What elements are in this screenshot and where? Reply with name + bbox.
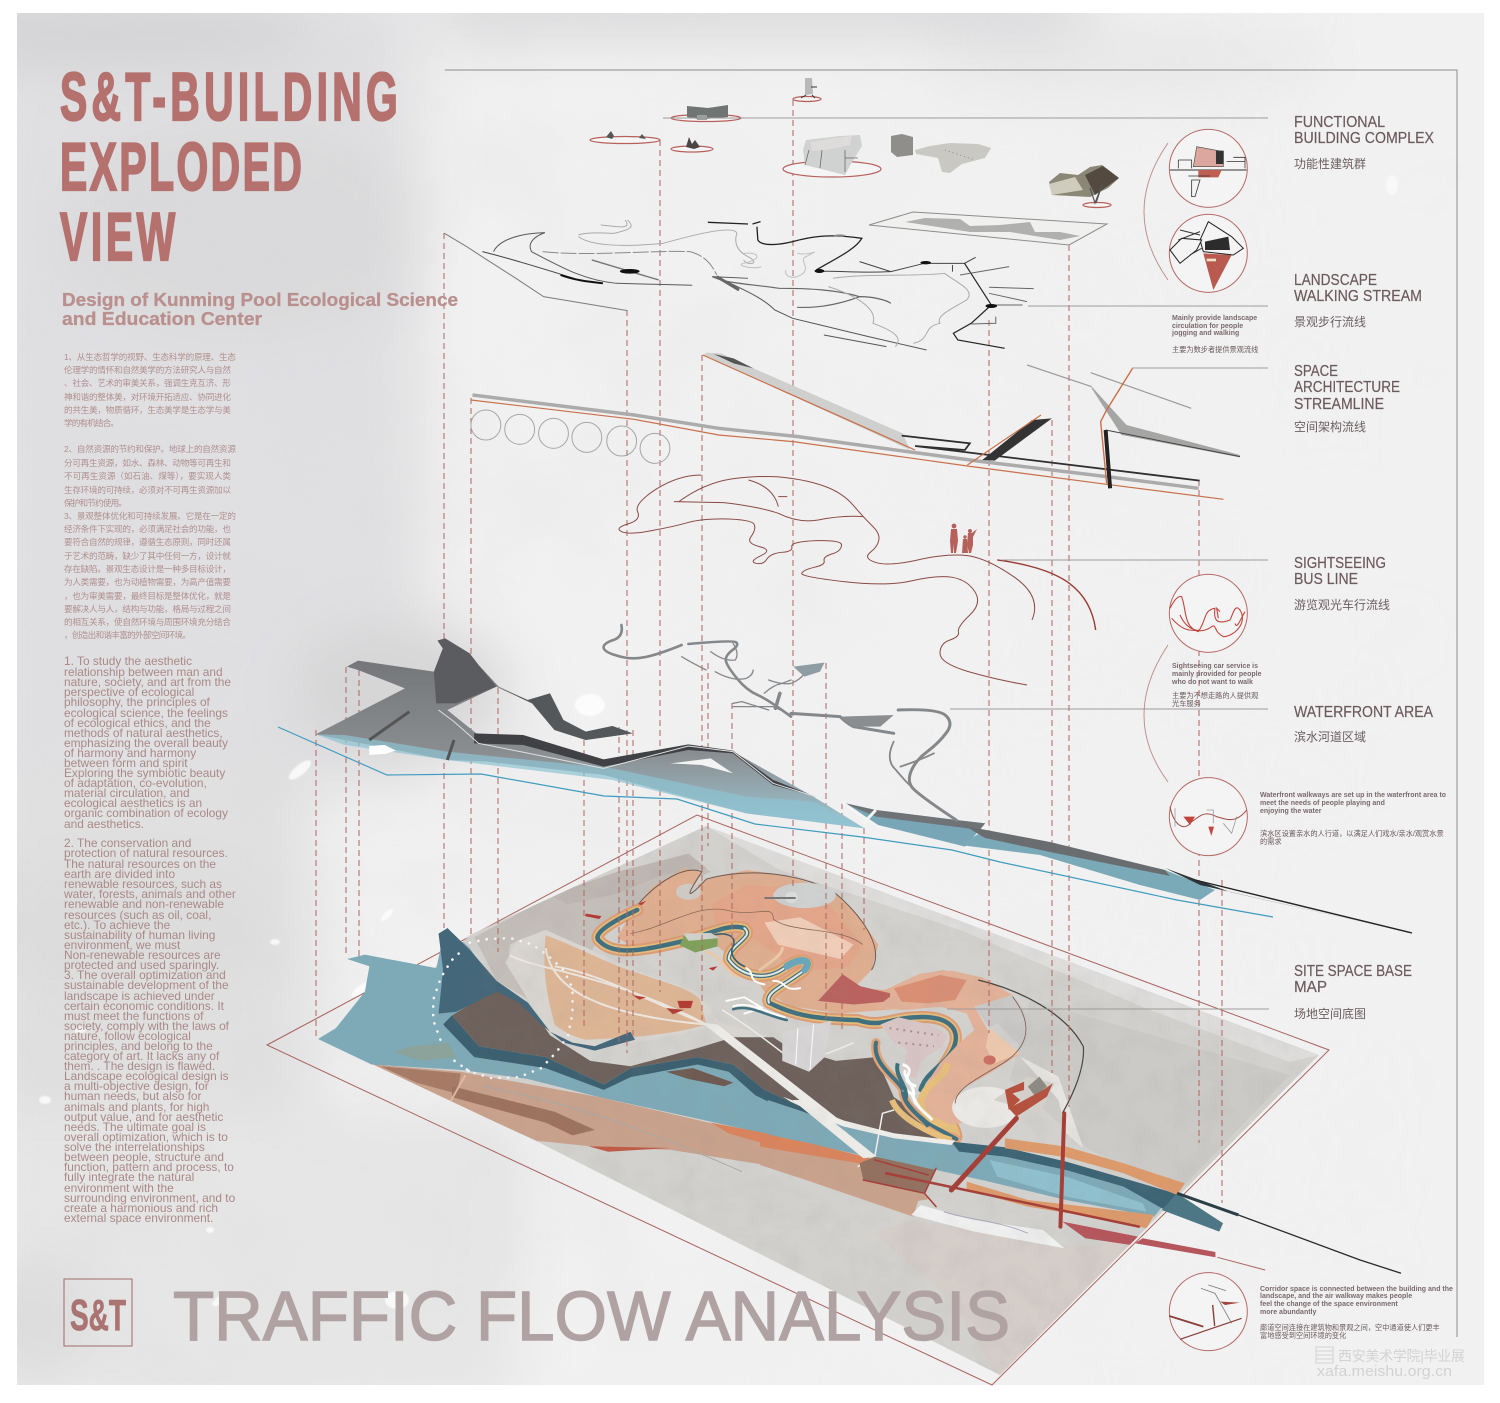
layer: functional building complex — [590, 78, 1119, 245]
logo: S&T square: S&T — [70, 1291, 126, 1340]
yellow banks — [921, 1063, 955, 1130]
english body text: human needs, but also for — [64, 1089, 202, 1103]
chinese body text: 生存环境的可持续，必须对不可再生资源加以 — [64, 484, 231, 495]
east pavilion — [993, 1077, 1055, 1113]
english body text: renewable resources, such as — [64, 877, 222, 891]
english body text: principles, and belong to the — [64, 1039, 213, 1053]
note: sightseeing: 光车服务 — [1172, 699, 1201, 708]
english body text: sustainable development of the — [64, 978, 229, 992]
east orange banks — [1005, 1138, 1185, 1195]
chinese body text: 要解决人与人，结构与功能，格局与过程之间 — [64, 603, 231, 614]
note: corridor: landscape, and the air walkway makes people — [1260, 1293, 1412, 1300]
english body text: environment with the — [64, 1181, 174, 1195]
note: waterfront: 的需求 — [1260, 837, 1282, 846]
english body text: Exploring the symbiotic beauty — [64, 766, 225, 780]
long deck — [472, 395, 1199, 488]
title line 3: VIEW — [60, 198, 175, 275]
english body text: resources (such as oil, coal, — [64, 908, 211, 922]
label: landscape walking stream — [1294, 272, 1422, 329]
note: corridor: Corridor space is connected between the building and the — [1260, 1286, 1453, 1293]
note: corridor — [1260, 1286, 1453, 1340]
main river — [768, 1100, 1173, 1217]
pier building white — [911, 1205, 1064, 1248]
extra strands — [726, 968, 800, 1017]
south tail — [996, 1245, 1130, 1375]
label: waterfront area: WATERFRONT AREA — [1294, 704, 1433, 721]
english body text: material circulation, and — [64, 786, 190, 800]
frame lines — [445, 70, 1457, 1337]
red bridges — [863, 1113, 1139, 1227]
english body text: The natural resources on the — [64, 857, 216, 871]
chinese body text: 2、自然资源的节约和保护。地球上的自然资源 — [64, 443, 236, 454]
label: space architecture streamline: STREAMLINE — [1294, 396, 1384, 413]
english body text: perspective of ecological — [64, 685, 194, 699]
english body text: solve the interrelationships — [64, 1140, 205, 1154]
english body text: must meet the functions of — [64, 1009, 204, 1023]
south bank — [372, 1064, 930, 1206]
chinese body text: 的共生美，物质循环，生态美学是生态学与美 — [64, 404, 231, 415]
label: functional building complex — [1294, 114, 1434, 171]
english body text: water, forests, animals and other — [63, 887, 236, 901]
detail circle: corridor — [1169, 1273, 1247, 1351]
label: space architecture streamline: 空间架构流线 — [1294, 419, 1366, 434]
english body text: 1. To study the aesthetic — [64, 654, 192, 668]
english body text: ecological science, the feelings — [64, 706, 228, 720]
english body text: and aesthetics. — [64, 817, 144, 831]
chinese body text: 保护和节约使用。 — [64, 497, 127, 508]
plaque — [869, 212, 1107, 245]
title — [60, 58, 398, 275]
english body text: protection of natural resources. — [64, 846, 228, 860]
note: waterfront: Waterfront walkways are set up in the waterfront area to — [1260, 792, 1446, 799]
english body text: external space environment. — [64, 1211, 213, 1225]
leader lines — [663, 118, 1269, 1009]
english body text: protected and used sparingly. — [64, 958, 219, 972]
english body text: output value, and for aesthetic — [64, 1110, 223, 1124]
lake ribbon — [316, 638, 865, 828]
strip extensions beyond map — [1135, 1193, 1401, 1273]
english body text: create a harmonious and rich — [64, 1201, 218, 1215]
english body text: ecological aesthetics is an — [64, 796, 202, 810]
layers in east-crop coordinates — [760, 971, 1223, 1377]
english body text: animals and plants, for high — [64, 1100, 209, 1114]
west water overhang — [318, 928, 488, 1072]
small red pavilions — [585, 901, 718, 1014]
note: sightseeing: who do not want to walk — [1171, 679, 1253, 686]
logo: S&T square — [64, 1279, 132, 1346]
label: sightseeing bus line — [1294, 555, 1390, 612]
note: waterfront: 滨水区设置亲水的人行道，以满足人们戏水/亲水/观赏水景 — [1260, 829, 1444, 838]
black wedge — [982, 418, 1052, 461]
watermark: 西安美术学院|毕业展 — [1338, 1348, 1465, 1364]
chinese body text: ，也为审美需要，最终目标是整体优化，就是 — [64, 590, 231, 601]
label: landscape walking stream: LANDSCAPE — [1294, 272, 1377, 289]
label: site space base map: 场地空间底图 — [1294, 1006, 1366, 1021]
label: landscape walking stream: WALKING STREAM — [1294, 288, 1422, 305]
label: site space base map — [1294, 963, 1412, 1021]
chinese body text: 神和谐的整体美，对环境开拓适应、协同进化 — [64, 391, 231, 402]
chinese body text: 分可再生资源，如水、森林、动物等可再生和 — [64, 457, 231, 468]
chinese body text: 经济条件下实现的，必须满足社会的功能，也 — [64, 523, 231, 534]
cantilever building — [1049, 165, 1119, 203]
layer: waterfront area — [316, 625, 987, 850]
science pavilion — [803, 135, 862, 175]
chinese body text: 、社会、艺术的审美关系，强调生克互济、形 — [64, 377, 231, 388]
label: site space base map: SITE SPACE BASE — [1294, 963, 1412, 980]
detail circle: building plan — [1169, 214, 1247, 292]
chinese body text: 不可再生资源（如石油、煤等），要实现人类 — [64, 470, 231, 481]
causeway over water — [793, 1100, 877, 1158]
english body text: category of art. It lacks any of — [64, 1049, 220, 1063]
meander river bands — [597, 910, 956, 1139]
building cluster — [880, 1017, 947, 1079]
english body text: landscape is achieved under — [64, 989, 215, 1003]
note: corridor: more abundantly — [1260, 1309, 1317, 1316]
label: functional building complex: FUNCTIONAL — [1294, 114, 1385, 131]
detail circle: waterfront — [1169, 778, 1247, 856]
note: corridor: 富地感受到空间环境的变化 — [1260, 1331, 1346, 1340]
note: waterfront: enjoying the water — [1260, 808, 1322, 815]
label: space architecture streamline: SPACE — [1294, 363, 1338, 380]
note: landscape — [1171, 315, 1258, 354]
note: landscape: jogging and walking — [1171, 330, 1239, 337]
heading: traffic flow analysis: TRAFFIC FLOW ANALYSIS — [173, 1277, 1010, 1355]
note: sightseeing: 主要为不想走路的人提供观 — [1172, 691, 1258, 700]
note: corridor: feel the change of the space environment — [1260, 1301, 1398, 1308]
label: landscape walking stream: 景观步行流线 — [1294, 315, 1366, 329]
english body text: philosophy, the principles of — [64, 695, 211, 709]
english body text: of adaptation, co-evolution, — [64, 776, 207, 790]
note: landscape: Mainly provide landscape — [1172, 315, 1257, 322]
map concrete ground — [372, 826, 1319, 1375]
east stretch — [842, 803, 985, 847]
vertical dashed connectors — [316, 100, 1222, 1203]
chinese body text: 学的有机结合。 — [64, 417, 119, 428]
label: sightseeing bus line: 游览观光车行流线 — [1294, 597, 1390, 612]
brown ground — [452, 988, 956, 1139]
south bank east — [760, 1157, 918, 1216]
note: landscape: 主要为数步者提供景观流线 — [1172, 345, 1258, 354]
arcs beside the detail circles — [1144, 143, 1168, 782]
label: functional building complex: 功能性建筑群 — [1294, 156, 1366, 171]
diagonal ramp — [704, 353, 910, 450]
chinese body text: 伦理学的情怀和自然美学的方法研究人与自然 — [64, 364, 231, 375]
title line 2: EXPLODED — [60, 128, 302, 205]
subtitle: and Education Center — [62, 309, 262, 329]
english body text: Landscape ecological design is — [64, 1069, 229, 1083]
english body text: fully integrate the natural — [64, 1170, 194, 1184]
circles row — [471, 410, 670, 463]
label: space architecture streamline — [1294, 363, 1400, 434]
english body text: overall optimization, which is to — [64, 1130, 228, 1144]
white causeway — [704, 1023, 848, 1128]
chinese body text: 1、从生态哲学的视野、生态科学的原理、生态 — [64, 351, 236, 362]
label: functional building complex: BUILDING COMPLEX — [1294, 130, 1434, 147]
english body text: Non-renewable resources are — [64, 948, 221, 962]
pale ring and tan field — [506, 930, 592, 966]
subtitle: Design of Kunming Pool Ecological Science — [62, 290, 458, 310]
map frame — [267, 815, 1329, 1385]
english body text: certain economic conditions. It — [64, 999, 225, 1013]
label: waterfront area — [1294, 704, 1433, 744]
english body text: emphasizing the overall beauty — [64, 736, 228, 750]
chinese body text: ，创造出和谐丰富的外部空间环境。 — [64, 629, 191, 640]
label: site space base map: MAP — [1294, 979, 1327, 996]
note: corridor: 廊道空间连接在建筑物和景观之间，空中通道使人们更丰 — [1260, 1323, 1440, 1332]
english body text: methods of natural aesthetics, — [64, 726, 223, 740]
peach east lobe — [875, 971, 1020, 1127]
taupe terrain — [474, 855, 711, 999]
note: sightseeing: Sightseeing car service is — [1172, 663, 1258, 670]
label: sightseeing bus line: SIGHTSEEING — [1294, 555, 1386, 572]
english body text: society, comply with the laws of — [64, 1019, 230, 1033]
subtitle — [62, 290, 458, 329]
layer: landscape walking stream — [444, 220, 1034, 350]
watermark: xafa.meishu.org.cn — [1317, 1363, 1452, 1380]
dotted ring — [465, 937, 574, 1080]
peach hill — [617, 868, 992, 1014]
english body text: relationship between man and — [64, 665, 223, 679]
red patch — [818, 974, 894, 1004]
label: space architecture streamline: ARCHITECTURE — [1294, 379, 1400, 396]
upper river — [604, 625, 956, 820]
english body text: between form and spirit — [64, 756, 188, 770]
pavilion buildings — [606, 78, 817, 149]
right tower bridge — [1027, 365, 1191, 408]
label: sightseeing bus line: BUS LINE — [1294, 571, 1358, 588]
site base map layer — [267, 810, 1401, 1390]
english body text: them. . The design is flawed. — [64, 1059, 215, 1073]
watermark — [1316, 1347, 1465, 1380]
green garden — [680, 935, 718, 952]
icon: family silhouette — [950, 524, 977, 553]
note: landscape: circulation for people — [1172, 323, 1243, 330]
west water — [375, 942, 799, 1134]
english body text: of ecological ethics, and the — [64, 716, 211, 730]
english body text: nature, society, and art from the — [64, 675, 231, 689]
detail circle: functional building — [1169, 129, 1247, 207]
english body text: nature, follow ecological — [64, 1029, 191, 1043]
clustered roof building — [891, 134, 991, 173]
brown lobe and white edge — [844, 1113, 921, 1135]
title line 1: S&T-BUILDING — [60, 58, 398, 135]
english body text: etc.). To achieve the — [64, 918, 171, 932]
layer: sightseeing bus line — [619, 475, 1096, 685]
chinese body text: 于艺术的范畴，缺少了其中任何一方，设计就 — [64, 550, 231, 561]
chinese body text: 要符合自然的规律，遵循生态原则，同时还属 — [64, 536, 231, 547]
english body text: 2. The conservation and — [64, 836, 191, 850]
english body text: a multi-objective design, for — [64, 1079, 209, 1093]
note: waterfront: meet the needs of people playing and — [1260, 800, 1385, 807]
note: sightseeing: mainly provided for people — [1172, 671, 1262, 678]
chinese body text: 存在缺陷。景观生态设计是一种多目标设计， — [64, 563, 231, 574]
blue water reference line — [278, 727, 1273, 917]
pad ellipses — [590, 96, 1111, 208]
english body text: earth are divided into — [64, 867, 175, 881]
layers in west-crop coordinates — [318, 854, 992, 1206]
chinese body text: 为人类需要，也为动植物需要，为高产值需要 — [64, 576, 231, 587]
layer: space architecture streamline — [471, 353, 1240, 499]
english body text: surrounding environment, and to — [64, 1191, 236, 1205]
note: waterfront — [1260, 792, 1446, 846]
english body text: organic combination of ecology — [64, 806, 228, 820]
label: waterfront area: 滨水河道区域 — [1294, 729, 1366, 744]
english body text: function, pattern and process, to — [64, 1160, 234, 1174]
english body text: 3. The overall optimization and — [64, 968, 226, 982]
english body text: renewable and non-renewable — [64, 897, 224, 911]
note: sightseeing — [1171, 663, 1262, 708]
white block building — [782, 1021, 831, 1072]
english body text — [63, 654, 236, 1225]
waterfront east strip — [960, 826, 1412, 933]
detail circle: sightseeing routes — [1169, 574, 1247, 652]
chinese body text: 3、景观整体优化和可持续发展。它是在一定的 — [64, 510, 236, 521]
english body text: of harmony and harmony — [64, 746, 196, 760]
chinese body text — [64, 351, 236, 640]
english body text: between people, structure and — [64, 1150, 224, 1164]
english body text: environment, we must — [64, 938, 181, 952]
chinese body text: 的相互关系，使自然环境与周围环境充分结合 — [64, 616, 231, 627]
watercolor grain — [300, 810, 1340, 1390]
english body text: needs. The ultimate goal is — [64, 1120, 206, 1134]
english body text: sustainability of human living — [64, 928, 215, 942]
white oval court — [952, 1087, 1019, 1128]
